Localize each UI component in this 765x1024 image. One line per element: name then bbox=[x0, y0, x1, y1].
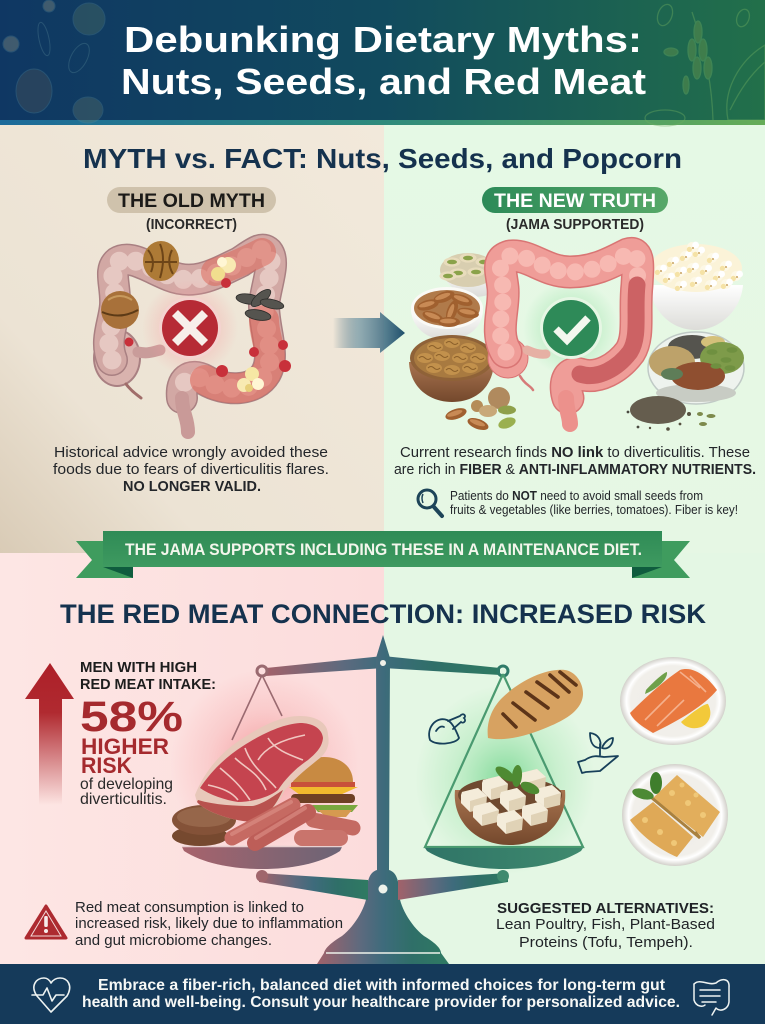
panel: red meat risk background bbox=[0, 553, 384, 964]
badge: the old myth bbox=[107, 187, 276, 213]
icon: intestine outline bbox=[694, 980, 729, 1015]
text: small seeds note: Patients do NOT need to avoid small seeds from bbox=[450, 489, 703, 503]
x mark badge bbox=[142, 280, 238, 376]
popcorn bottom bbox=[237, 367, 264, 392]
icon: hand holding plant bbox=[578, 733, 618, 773]
patties bbox=[172, 826, 228, 846]
text: suggested alternatives: Lean Poultry, Fish, Plant-Based bbox=[496, 916, 715, 933]
icon: red up arrow bbox=[25, 663, 74, 805]
text: historical advice: Historical advice wrongly avoided these bbox=[54, 444, 328, 461]
glow behind alternatives bbox=[415, 685, 595, 875]
text: historical advice: NO LONGER VALID. bbox=[123, 478, 261, 495]
title bbox=[121, 19, 646, 102]
illustration: tempeh plate bbox=[622, 764, 728, 866]
text: historical advice bbox=[53, 444, 329, 495]
panel: truth background bbox=[384, 125, 765, 553]
balance scale bbox=[182, 635, 583, 964]
footer message: health and well-being. Consult your healthcare provider for personalized advice. bbox=[82, 994, 680, 1011]
almond bowl bbox=[411, 287, 483, 340]
text: historical advice: foods due to fears of diverticulitis flares. bbox=[53, 461, 329, 478]
whole walnut bbox=[101, 291, 139, 329]
illustration: grilled chicken bbox=[488, 670, 583, 739]
illustration: healthy colon with foods bbox=[409, 242, 744, 432]
text: suggested alternatives: SUGGESTED ALTERNATIVES: bbox=[497, 900, 714, 917]
chia pile bbox=[627, 396, 716, 431]
loose nuts bbox=[444, 387, 517, 432]
footer message: Embrace a fiber-rich, balanced diet with informed choices for long-term gut bbox=[98, 977, 666, 994]
text: red meat consumption: and gut microbiome changes. bbox=[75, 933, 272, 949]
banner: jama supports bbox=[76, 531, 690, 578]
stat: 58 percent higher risk: RED MEAT INTAKE: bbox=[80, 676, 216, 693]
sausages bbox=[232, 802, 353, 843]
text: red meat consumption: increased risk, likely due to inflammation bbox=[75, 916, 343, 932]
title: Nuts, Seeds, and Red Meat bbox=[121, 61, 646, 102]
badge: the old myth: THE OLD MYTH bbox=[118, 191, 265, 212]
header banner bbox=[0, 0, 765, 126]
sunflower seeds bbox=[235, 286, 285, 322]
text: red meat consumption bbox=[75, 900, 343, 949]
icon: heart with pulse bbox=[32, 978, 70, 1012]
text: current research bbox=[394, 444, 756, 478]
panel: myth background bbox=[0, 125, 384, 553]
stat: 58 percent higher risk: 58% bbox=[80, 693, 183, 741]
text: current research: Current research finds NO link to diverticulitis. These bbox=[400, 444, 750, 461]
text: red meat consumption: Red meat consumption is linked to bbox=[75, 900, 304, 916]
panel: alternatives background bbox=[384, 553, 765, 964]
colon body healthy bbox=[488, 253, 638, 424]
illustration: salmon plate bbox=[620, 657, 726, 745]
header decorative wheat and leaves bbox=[645, 2, 765, 126]
stat: 58 percent higher risk bbox=[80, 659, 216, 808]
illustration: red meat pile bbox=[172, 716, 358, 846]
label: jama supported: (JAMA SUPPORTED) bbox=[506, 216, 644, 233]
stat: 58 percent higher risk: of developing bbox=[80, 776, 173, 793]
footer bar bbox=[0, 964, 765, 1024]
text: suggested alternatives bbox=[496, 900, 715, 951]
illustration: inflamed colon with foods bbox=[93, 241, 291, 432]
heading: red meat connection: THE RED MEAT CONNECTION: INCREASED RISK bbox=[60, 599, 706, 629]
right pan and strings bbox=[425, 674, 583, 847]
stat: 58 percent higher risk: RISK bbox=[81, 753, 132, 778]
heading: myth vs fact: MYTH vs. FACT: Nuts, Seeds, and Popcorn bbox=[83, 143, 682, 174]
basil leaves bbox=[493, 764, 541, 797]
text: small seeds note: fruits & vegetables (like berries, tomatoes). Fiber is key! bbox=[450, 503, 738, 517]
arrow: myth to truth bbox=[333, 312, 405, 353]
burger bbox=[289, 757, 358, 817]
glass bowl of seeds bbox=[648, 332, 744, 404]
banner: jama supports: THE JAMA SUPPORTS INCLUDING THESE IN A MAINTENANCE DIET. bbox=[125, 541, 642, 559]
check mark badge bbox=[540, 297, 602, 359]
badge: the new truth bbox=[482, 187, 668, 213]
beam and post bbox=[266, 656, 500, 676]
pistachio bowl bbox=[440, 253, 496, 297]
icon: magnifying glass bbox=[418, 490, 442, 516]
left pan and strings bbox=[232, 675, 282, 740]
illustration: tofu bowl bbox=[455, 764, 565, 845]
header decorative nuts and seeds bbox=[3, 0, 105, 123]
text: small seeds note bbox=[450, 489, 738, 517]
text: current research: are rich in FIBER & ANTI-INFLAMMATORY NUTRIENTS. bbox=[394, 461, 756, 478]
stat: 58 percent higher risk: MEN WITH HIGH bbox=[80, 659, 197, 676]
icon: poultry outline bbox=[429, 714, 465, 744]
walnut top bbox=[143, 241, 179, 281]
badge: the new truth: THE NEW TRUTH bbox=[494, 191, 656, 212]
glow behind meat bbox=[170, 670, 360, 860]
footer message bbox=[82, 977, 680, 1011]
steak bbox=[195, 716, 329, 822]
icon: warning triangle bbox=[26, 906, 66, 938]
label: incorrect: (INCORRECT) bbox=[146, 216, 237, 233]
inflamed bulges bbox=[124, 278, 291, 377]
walnut wood bowl bbox=[409, 335, 494, 402]
popcorn top bbox=[211, 257, 236, 281]
popcorn bowl bbox=[649, 242, 743, 330]
stat: 58 percent higher risk: HIGHER bbox=[81, 734, 169, 759]
title: Debunking Dietary Myths: bbox=[124, 19, 642, 60]
text: suggested alternatives: Proteins (Tofu, Tempeh). bbox=[519, 934, 693, 951]
stat: 58 percent higher risk: diverticulitis. bbox=[80, 791, 167, 808]
colon body bbox=[93, 250, 271, 432]
